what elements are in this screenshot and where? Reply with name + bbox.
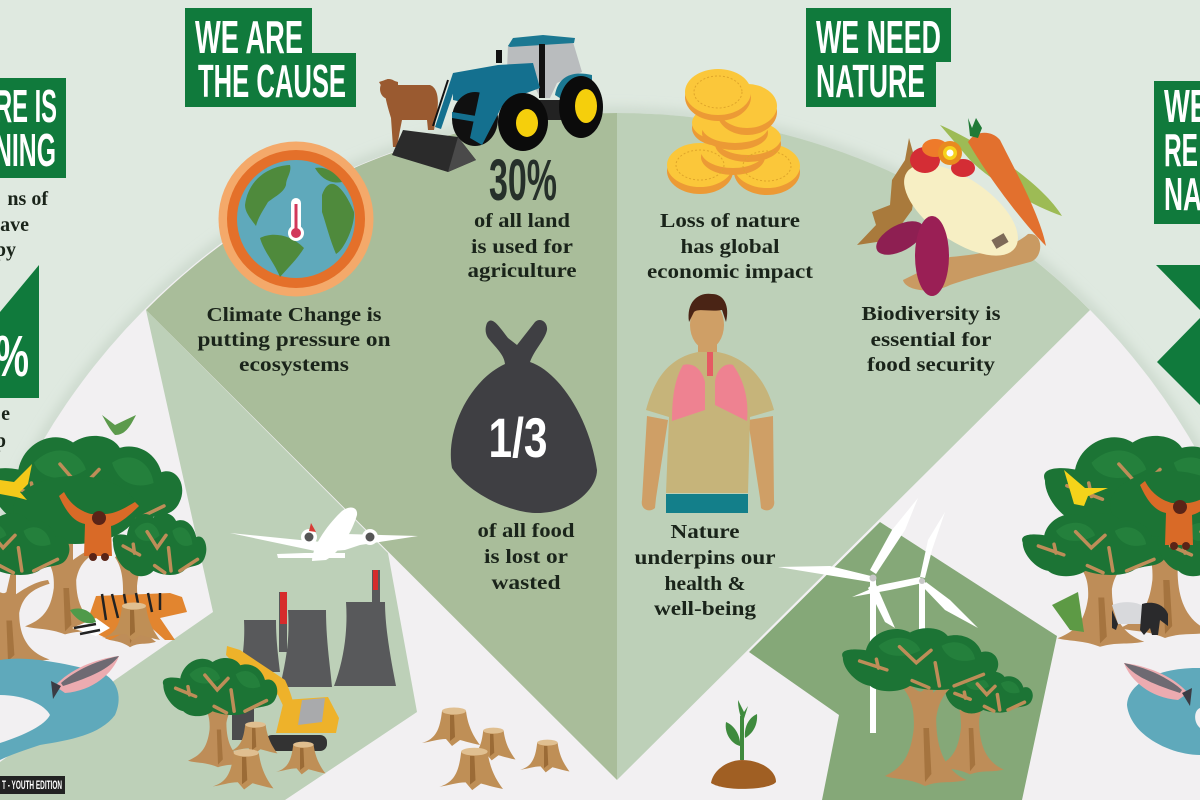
icon: power station (240, 570, 396, 687)
text: nature health: underpins our (634, 547, 776, 569)
icon: green bird (102, 415, 136, 435)
text: land for agriculture: is used for (471, 236, 573, 258)
text: land for agriculture: agriculture (468, 260, 577, 282)
heading: left cropped (0, 78, 66, 178)
text: food wasted: is lost or (484, 546, 568, 568)
text: left cropped lower (0, 403, 10, 452)
icon: cow (379, 79, 438, 147)
icon: food crops (857, 118, 1062, 296)
text: climate change: putting pressure on (198, 329, 390, 351)
text: loss of nature (647, 210, 813, 283)
icon: two trees (842, 628, 1033, 786)
heading: we need nature: WE NEED (816, 11, 941, 63)
icon: garbage bag (451, 320, 597, 513)
icon: sapling (711, 700, 776, 789)
heading: we are the cause (185, 8, 356, 107)
icon: coins (667, 69, 800, 195)
source tag (0, 776, 65, 794)
text: food wasted (478, 520, 574, 594)
icon: orangutan right (1140, 481, 1200, 550)
icon: site stumps (213, 722, 326, 790)
text: nature health (634, 521, 776, 620)
text: biodiversity: Biodiversity is (862, 303, 1001, 325)
icon: garbage bag: 1/3 (488, 406, 548, 469)
text: nature health: Nature (670, 521, 740, 543)
panel: we are the cause wedge (146, 113, 617, 780)
text: loss of nature: Loss of nature (660, 210, 800, 232)
text: biodiversity: food security (867, 354, 995, 376)
icon: river right (1127, 668, 1200, 755)
text: climate change: Climate Change is (206, 304, 382, 326)
text: land for agriculture: of all land (474, 210, 570, 232)
icon: salmon right (1124, 663, 1192, 706)
text: left cropped intro: ave (0, 214, 29, 236)
text: nature health: well-being (654, 598, 756, 620)
text: climate change (198, 304, 390, 376)
icon: tapir (1112, 602, 1168, 635)
icon: wind turbines (778, 498, 978, 733)
icon: right forest trees (1022, 436, 1200, 647)
text: left cropped lower: e (1, 403, 10, 425)
text: land for agriculture (468, 210, 577, 282)
heading: we are the cause: WE ARE (195, 11, 303, 63)
heading: we are the cause: THE CAUSE (198, 55, 346, 107)
text: nature health: health & (664, 573, 746, 595)
heading: we need nature (806, 8, 951, 107)
panel: renewable green polygon (749, 522, 1057, 800)
heading: right cropped (1154, 80, 1200, 224)
icon: felled site tree (163, 658, 277, 767)
text: loss of nature: economic impact (647, 261, 813, 283)
right green arrow (1156, 265, 1200, 405)
text: climate change: ecosystems (239, 354, 349, 376)
left green arrow stat (0, 265, 39, 398)
source tag: T - YOUTH EDITION (2, 778, 62, 792)
icon: yellow bird right (1064, 470, 1108, 506)
icon: tree stumps (422, 708, 570, 790)
icon: left forest trees (0, 436, 206, 664)
panel: we need nature wedge (617, 113, 1090, 780)
panel: lower left wedge (0, 310, 417, 800)
icon: river left (0, 659, 119, 760)
text: food wasted: wasted (492, 572, 560, 594)
icon: airplane (230, 508, 418, 561)
icon: globe with thermometer (218, 142, 374, 296)
stat: 30%: 30% (489, 148, 557, 213)
text: left cropped intro (0, 188, 48, 261)
text: food wasted: of all food (478, 520, 574, 542)
icon: salmon left (51, 656, 119, 699)
text: biodiversity (862, 303, 1001, 376)
icon: yellow bird left (0, 464, 32, 500)
icon: tiger (70, 593, 187, 641)
icon: tractor (392, 35, 603, 172)
icon: person with lungs (642, 294, 774, 513)
text: left cropped intro: ns of (7, 188, 48, 210)
text: biodiversity: essential for (870, 329, 992, 351)
icon: excavator (226, 646, 339, 751)
icon: orangutan left (59, 492, 139, 561)
heading: we need nature: NATURE (816, 55, 925, 107)
text: loss of nature: has global (680, 236, 780, 258)
